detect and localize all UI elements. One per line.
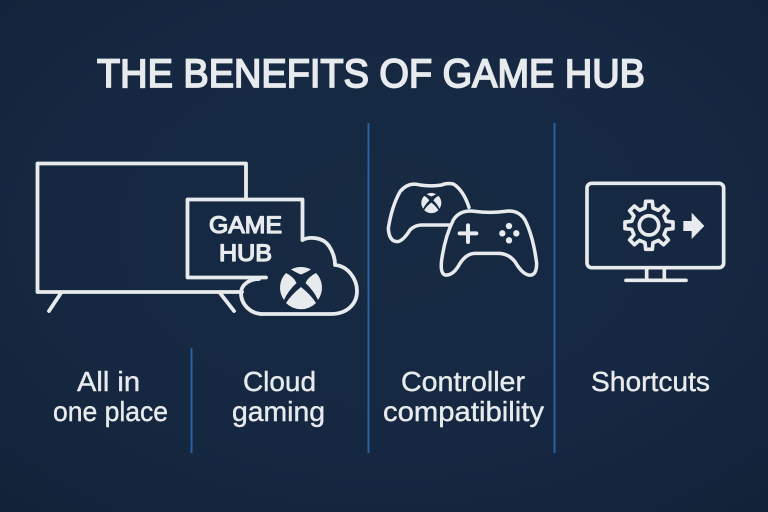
game hub screen [188,200,302,278]
icon: controllers [388,184,537,275]
label: cloud gaming: Cloud [243,366,316,397]
back controller xbox logo [421,193,441,213]
label: cloud gaming: gaming [232,396,325,427]
label: cloud gaming [232,366,325,427]
front controller [441,211,537,275]
plus pad [460,225,476,242]
icon: monitor with gear and arrow [587,183,724,280]
game hub label: GAME [209,212,282,239]
label: controller compatibility [383,366,544,427]
gear [625,201,673,249]
arrow [683,213,704,239]
TV legs [49,293,234,311]
icon: TV with game hub and cloud [38,164,357,314]
TV outline [38,164,246,292]
label: all in one place [53,366,168,427]
label: shortcuts: Shortcuts [591,366,710,397]
game hub label: HUB [219,240,272,267]
label: controller compatibility: Controller [401,366,525,397]
title: THE BENEFITS OF GAME HUB [97,52,645,96]
icon: xbox logo on cloud [280,267,322,309]
back controller [388,184,469,242]
cloud [241,238,357,314]
label: controller compatibility: compatibility [383,396,544,427]
monitor stand [626,268,686,280]
label: all in one place: All in [77,366,140,397]
divider lines [192,123,554,453]
label: all in one place: one place [53,396,168,427]
monitor screen [587,183,724,268]
game hub label [209,212,282,267]
buttons [499,223,519,243]
